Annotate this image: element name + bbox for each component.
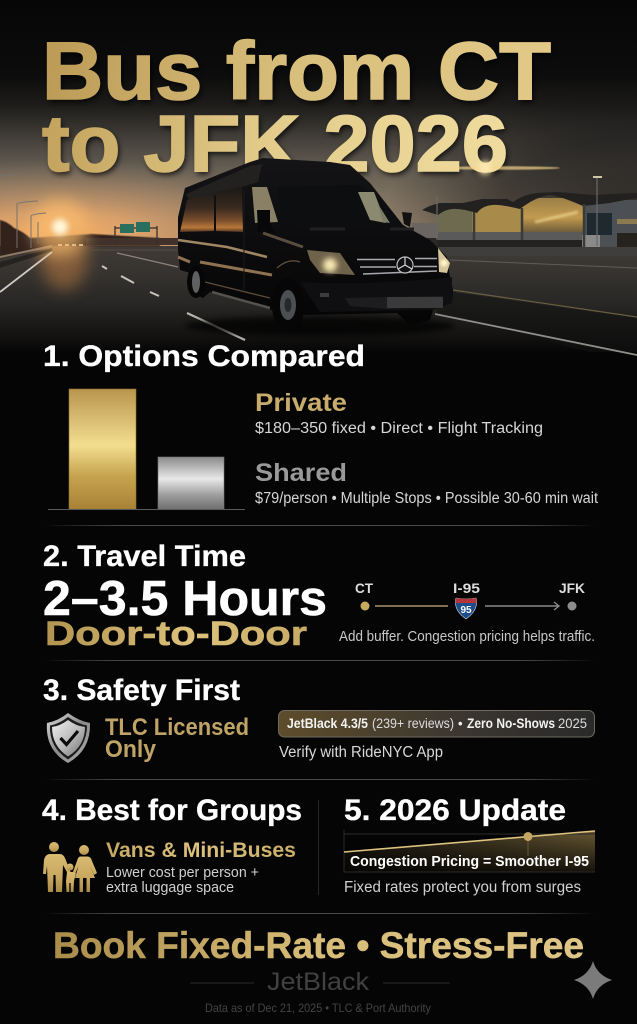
title: to JFK 2026 (44, 102, 510, 191)
grille and star badge (357, 257, 437, 276)
review badge (278, 710, 594, 737)
title: Bus from CT (44, 29, 553, 120)
heading: 4. Best for Groups (42, 794, 302, 827)
panel: best for groups (42, 794, 302, 896)
route diagram: JFK (559, 581, 585, 596)
TLC licensed label: TLC Licensed (105, 714, 249, 741)
title: Bus from CT (42, 26, 551, 117)
panel: travel time (43, 540, 595, 653)
icon: sun (32, 200, 88, 256)
airport terminal (412, 176, 637, 256)
route diagram (355, 581, 585, 619)
side windows with sunset reflection (180, 187, 278, 233)
wheels (187, 266, 304, 332)
data source note: Data as of Dec 21, 2025 • TLC & Port Authority (205, 1001, 431, 1015)
shared option: $79/person • Multiple Stops • Possible 30-60 min wait (255, 490, 599, 507)
group benefit text (106, 865, 259, 896)
review badge: 2025 (558, 715, 587, 731)
vans label: Vans & Mini-Buses (106, 838, 296, 862)
van (178, 158, 455, 336)
trend chart (344, 830, 595, 872)
route diagram: I-95 (453, 581, 481, 596)
verify note: Verify with RideNYC App (279, 744, 443, 761)
bumper (300, 277, 452, 312)
private option: $180–350 fixed • Direct • Flight Tracking (255, 420, 543, 437)
TLC licensed label (105, 714, 249, 763)
trend chart: Congestion Pricing = Smoother I-95 (350, 853, 589, 870)
road markings (0, 250, 637, 340)
review badge: JetBlack 4.3/5 (287, 715, 368, 731)
street lights (0, 174, 46, 248)
title: to JFK 2026 (42, 99, 508, 188)
door-to-door label: Door-to-Door (45, 615, 307, 653)
group benefit text: Lower cost per person + (106, 865, 259, 881)
bar chart (48, 389, 245, 510)
headlights (307, 248, 450, 275)
hero scene: highway at sunset (0, 0, 637, 355)
brand name: JetBlack (267, 968, 370, 996)
panel: 2026 update (344, 794, 595, 896)
icon: shield with check (47, 713, 90, 763)
roof highlight (186, 164, 262, 203)
icon: family (43, 842, 97, 892)
car lights on the horizon (58, 244, 86, 246)
windshield (277, 185, 403, 227)
group benefit text: extra luggage space (106, 880, 234, 896)
route diagram: CT (355, 581, 374, 596)
private option (255, 389, 543, 437)
panel: safety first (43, 674, 594, 763)
private option: Private (255, 389, 347, 417)
shared option: Shared (255, 459, 347, 487)
heading: 5. 2026 Update (344, 794, 566, 827)
review badge: Zero No-Shows (467, 715, 555, 731)
heading: 2. Travel Time (43, 540, 246, 573)
call to action: Book Fixed-Rate • Stress-Free (53, 925, 584, 966)
body reflection lines (178, 190, 414, 308)
route note: Add buffer. Congestion pricing helps traffic. (339, 629, 595, 645)
treeline (0, 220, 160, 258)
icon: interstate 95 shield: 95 (460, 605, 472, 616)
TLC licensed label: Only (105, 736, 157, 763)
guard rail (0, 246, 52, 257)
icon: interstate 95 shield (455, 598, 477, 619)
title (42, 26, 560, 191)
highway signs (115, 222, 157, 244)
shared option (255, 459, 599, 507)
panel: options compared (43, 340, 599, 510)
heading: 3. Safety First (43, 674, 240, 707)
update note: Fixed rates protect you from surges (344, 879, 581, 896)
icon: sparkle (574, 961, 612, 999)
review badge: • (458, 716, 463, 731)
lens flare (440, 161, 560, 175)
review badge: (239+ reviews) (372, 715, 454, 731)
heading: 1. Options Compared (43, 340, 365, 373)
big duration: 2–3.5 Hours (43, 572, 327, 626)
